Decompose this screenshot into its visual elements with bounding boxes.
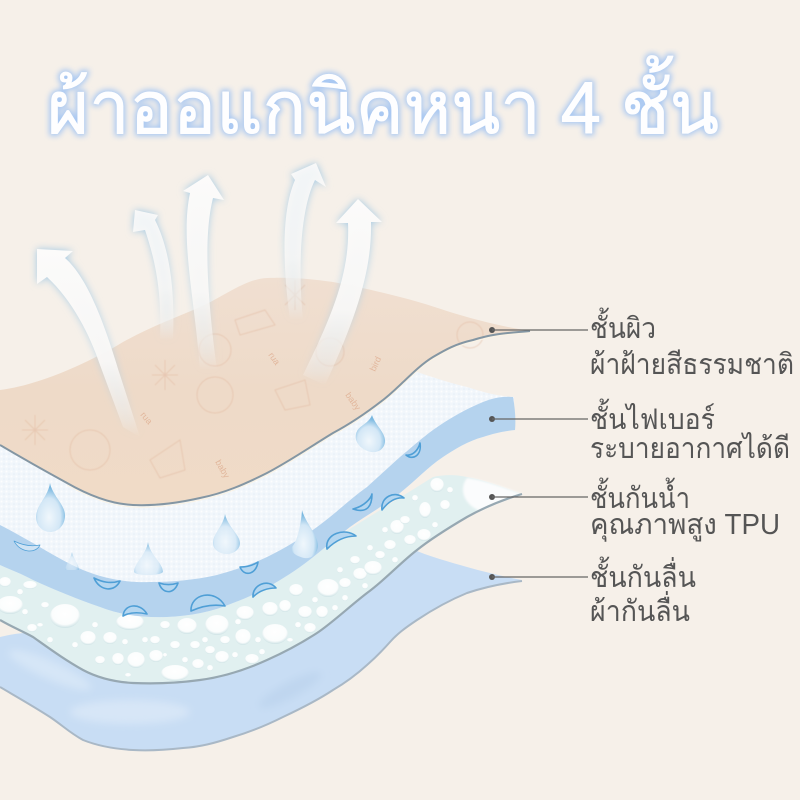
arrow glow <box>37 163 382 437</box>
callout: waterproof layer <box>489 477 780 542</box>
half droplets on band <box>14 443 420 616</box>
fabric print words: baby <box>213 458 232 480</box>
callout: skin layer: ชั้นผิว <box>590 307 656 345</box>
fabric print words: rua <box>266 350 282 367</box>
fabric print words: baby <box>343 390 363 413</box>
callout: waterproof layer: คุณภาพสูง TPU <box>590 509 780 542</box>
layer 2: breathable fiber <box>0 360 515 617</box>
arrow 2 <box>133 210 173 340</box>
fabric print words: bird <box>368 355 383 373</box>
callout: skin layer <box>489 307 794 381</box>
arrow 5 <box>303 199 382 385</box>
fabric print words: rua <box>138 410 154 426</box>
arrow 4 <box>285 163 326 320</box>
arrows: rising air <box>37 163 382 437</box>
callout: fiber layer <box>489 398 790 465</box>
title: ผ้าออแกนิคหนา 4 ชั้น <box>47 55 719 149</box>
title: ผ้าออแกนิคหนา 4 ชั้น <box>47 55 719 149</box>
layer 4: anti-slip fabric <box>0 548 522 750</box>
arrow 3 <box>183 175 224 370</box>
water beads <box>0 478 453 681</box>
water drops <box>36 415 385 575</box>
arrow 1 <box>37 249 140 437</box>
callout: anti-slip layer: ผ้ากันลื่น <box>590 591 690 628</box>
callout: anti-slip layer <box>489 556 696 628</box>
layer 3: TPU waterproof bubbles <box>0 475 522 683</box>
blue band <box>0 397 515 617</box>
callout: waterproof layer: ชั้นกันน้ำ <box>590 477 690 515</box>
layer 1: natural cotton skin <box>0 278 530 507</box>
callout: anti-slip layer: ชั้นกันลื่น <box>590 556 696 594</box>
fabric print words <box>138 350 383 480</box>
callout: fiber layer: ชั้นไฟเบอร์ <box>590 398 715 436</box>
fabric print pattern <box>22 280 483 478</box>
